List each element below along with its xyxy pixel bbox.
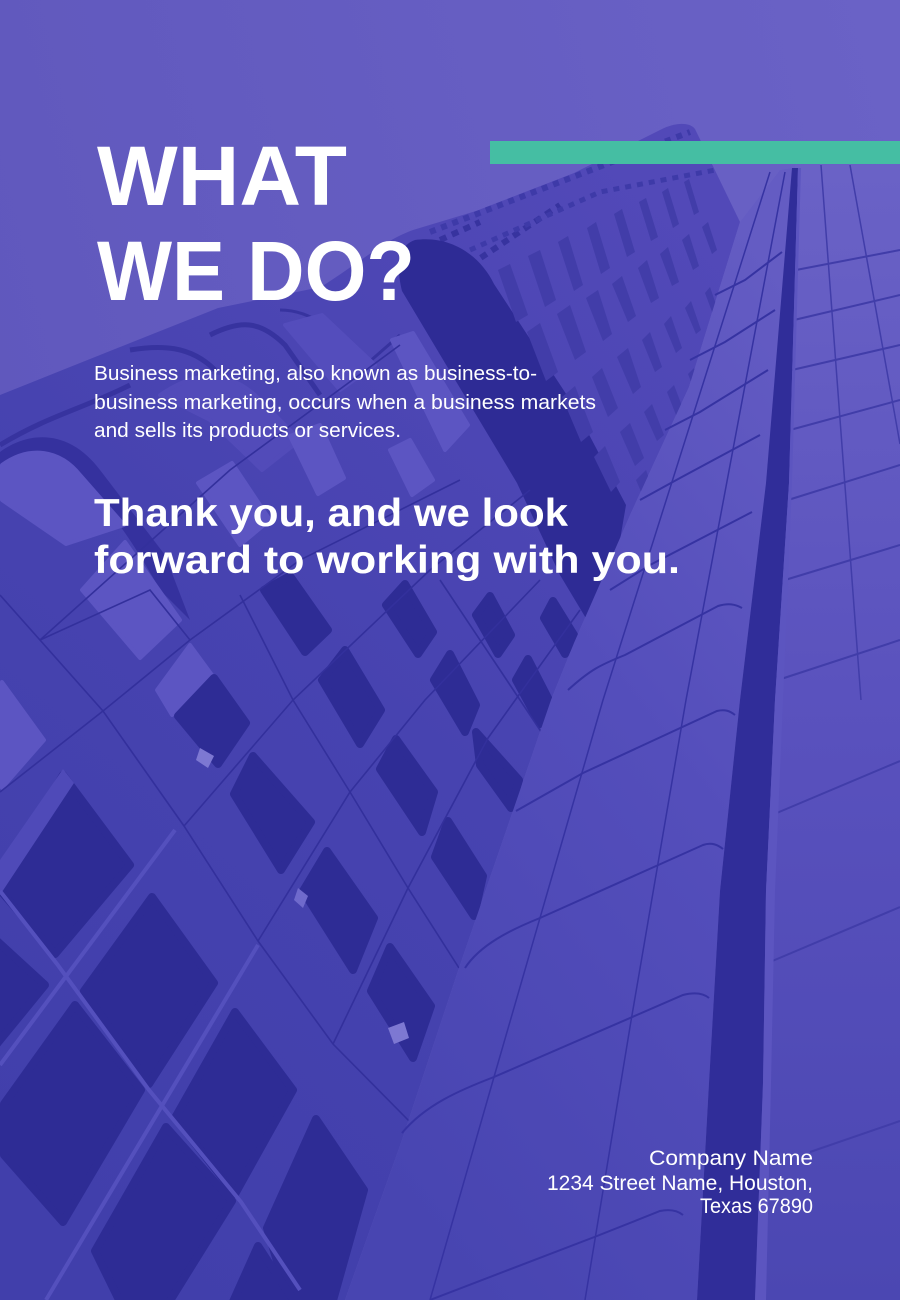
intro paragraph: business marketing, occurs when a business markets — [94, 391, 596, 414]
company address: Texas 67890 — [700, 1195, 813, 1218]
thin light mullions — [0, 830, 300, 1300]
company address — [547, 1147, 813, 1218]
mullion lines — [0, 345, 580, 1125]
dark valley between wings — [399, 239, 626, 625]
left building — [0, 124, 740, 1300]
middle curved building face — [345, 168, 792, 1300]
windows: upper rows, lighter — [2, 315, 468, 788]
panel seams — [402, 172, 785, 1300]
intro paragraph — [94, 362, 596, 442]
company address: 1234 Street Name, Houston, — [547, 1172, 813, 1195]
roof arcs — [0, 132, 715, 445]
intro paragraph: and sells its products or services. — [94, 419, 401, 442]
lighter vertical rib — [755, 168, 801, 1300]
title — [97, 129, 415, 318]
thank-you message: Thank you, and we look — [94, 492, 568, 535]
right building face — [752, 165, 900, 1300]
thank-you message — [94, 492, 680, 582]
title: WHAT — [97, 129, 347, 223]
dark vertical stripe — [697, 168, 798, 1300]
windows: dark panes — [0, 576, 574, 1300]
window reflections — [0, 748, 409, 1044]
title: WE DO? — [97, 224, 415, 318]
thank-you message: forward to working with you. — [94, 539, 680, 582]
windows: dark grid on the upper right face — [498, 179, 721, 508]
accent bar — [490, 141, 900, 164]
company address: Company Name — [649, 1147, 813, 1170]
intro paragraph: Business marketing, also known as business-to- — [94, 362, 537, 385]
